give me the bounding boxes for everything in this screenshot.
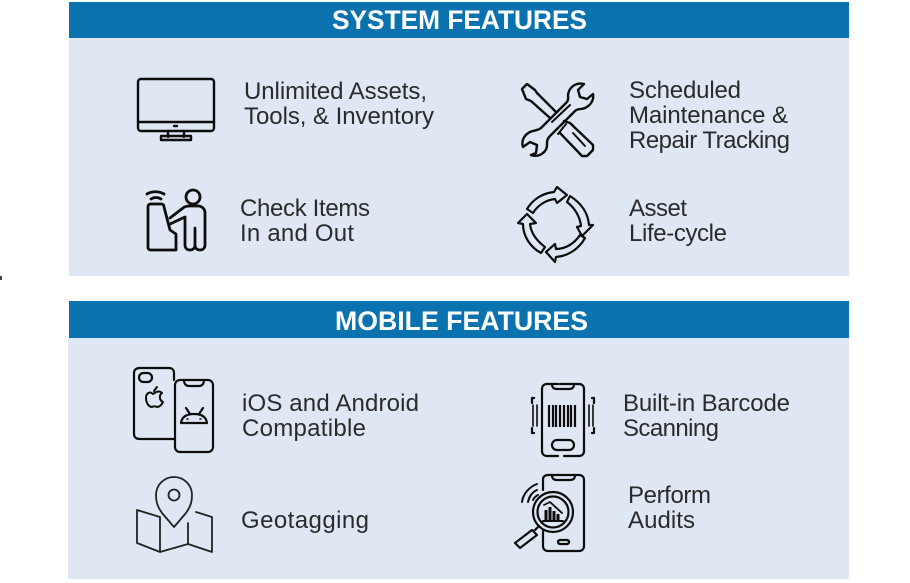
text: ios and android: Compatible	[242, 415, 366, 442]
text: check items: Check Items	[240, 195, 370, 222]
icon: wrench and screwdriver	[522, 84, 593, 156]
text: asset life-cycle: Asset	[629, 195, 687, 222]
text: built-in barcode: Built-in Barcode	[623, 390, 790, 417]
text: unlimited assets: Unlimited Assets,	[244, 78, 427, 105]
icon: check in person	[147, 190, 205, 250]
text: asset life-cycle: Life-cycle	[629, 220, 727, 247]
heading: mobile features: MOBILE FEATURES	[335, 306, 588, 336]
heading: system features: SYSTEM FEATURES	[332, 5, 587, 35]
text: scheduled maintenance: Scheduled	[629, 77, 741, 104]
icon: two phones	[134, 368, 213, 452]
text: scheduled maintenance: Maintenance &	[629, 102, 788, 129]
panel: mobile features	[68, 301, 849, 579]
mark: edge speck	[0, 276, 2, 280]
icon: barcode phone	[532, 384, 594, 456]
text: ios and android: iOS and Android	[242, 390, 419, 417]
text: scheduled maintenance: Repair Tracking	[629, 127, 790, 154]
text: built-in barcode: Scanning	[623, 415, 719, 442]
heading: system features	[69, 2, 849, 38]
icon: map pin	[137, 477, 212, 552]
text: unlimited assets: Tools, & Inventory	[244, 103, 434, 130]
icon: audit phone with magnifier	[515, 475, 584, 551]
text: check items: In and Out	[240, 220, 354, 247]
icon: monitor	[138, 79, 214, 140]
heading: mobile features	[69, 301, 849, 338]
text: geotagging: Geotagging	[241, 507, 369, 534]
icon: life-cycle arrows	[518, 187, 593, 262]
text: perform audits: Audits	[628, 507, 695, 534]
text: perform audits: Perform	[628, 482, 711, 509]
panel: system features	[69, 2, 849, 276]
